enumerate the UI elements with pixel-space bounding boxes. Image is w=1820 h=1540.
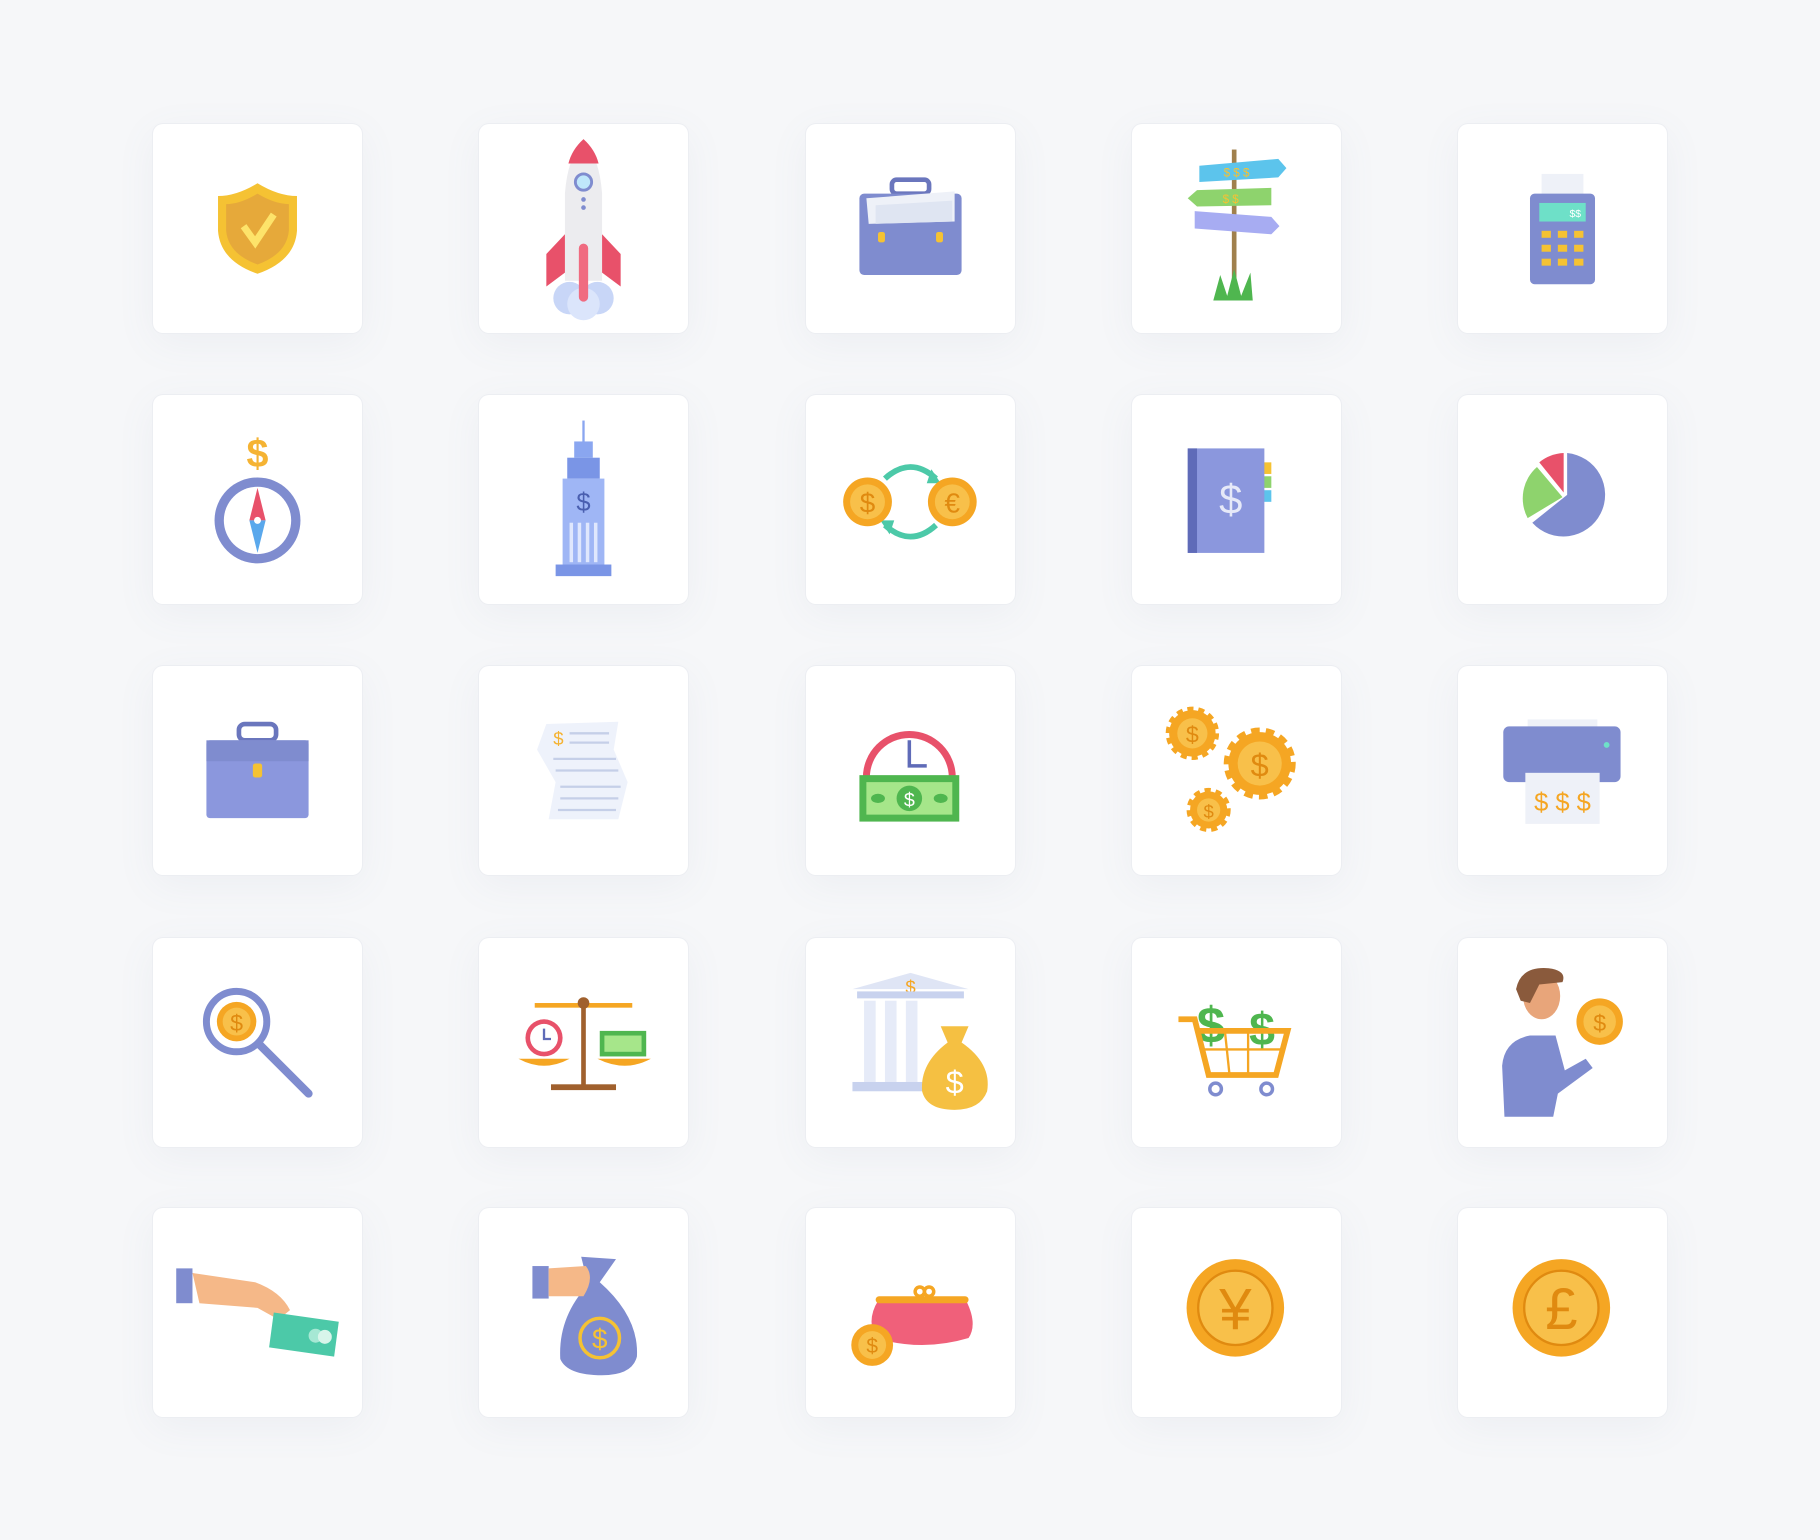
card: hand with money bag [479, 1208, 688, 1417]
card: gears: $ [1203, 801, 1214, 822]
card: shopping cart: $ [1197, 996, 1225, 1053]
card: compass: $ [247, 432, 269, 476]
card: shopping cart [1132, 938, 1341, 1147]
card: clock and money: $ [904, 789, 915, 811]
card: gears: $ [1251, 747, 1269, 783]
card: signpost [1132, 124, 1341, 333]
card: hand with credit card [153, 1208, 362, 1417]
card: building [479, 395, 688, 604]
card: ledger book: $ [1219, 475, 1242, 522]
card: shopping cart: $ [1249, 1003, 1275, 1055]
card: pound coin [1458, 1208, 1667, 1417]
card: person with coin [1458, 938, 1667, 1147]
card: magnifier [153, 938, 362, 1147]
card: currency exchange: € [945, 487, 961, 518]
card: ledger book [1132, 395, 1341, 604]
card: currency exchange [806, 395, 1015, 604]
card: building: $ [576, 489, 591, 517]
card: printer with dollars [1458, 666, 1667, 875]
card: printer with dollars: $ $ $ [1534, 789, 1591, 817]
card: briefcase [153, 666, 362, 875]
card: bank and money bag [806, 938, 1015, 1147]
card: pie chart [1458, 395, 1667, 604]
card: card terminal [1458, 124, 1667, 333]
card: gears: $ [1186, 722, 1199, 748]
card: balance scale [479, 938, 688, 1147]
card: hand with money bag: $ [592, 1323, 608, 1354]
card: shield [153, 124, 362, 333]
card: signpost: $ $ $ [1224, 166, 1250, 179]
card: bank and money bag: $ [946, 1065, 964, 1101]
card: yen coin: ¥ [1218, 1277, 1252, 1342]
card: invoice document: $ [553, 728, 564, 749]
card: currency exchange: $ [860, 487, 876, 518]
card: magnifier: $ [230, 1010, 243, 1036]
card: compass [153, 395, 362, 604]
card: card terminal: $$ [1569, 209, 1581, 220]
card: purse: $ [866, 1335, 878, 1358]
card: pound coin: £ [1545, 1277, 1577, 1342]
card: signpost: $ $ [1223, 193, 1239, 206]
card: briefcase with papers [806, 124, 1015, 333]
card: rocket [479, 124, 688, 333]
card: purse [806, 1208, 1015, 1417]
card: person with coin: $ [1593, 1010, 1606, 1036]
card: invoice document [479, 666, 688, 875]
card: clock and money [806, 666, 1015, 875]
card: gears [1132, 666, 1341, 875]
card: bank and money bag: $ [905, 977, 916, 998]
card: yen coin [1132, 1208, 1341, 1417]
